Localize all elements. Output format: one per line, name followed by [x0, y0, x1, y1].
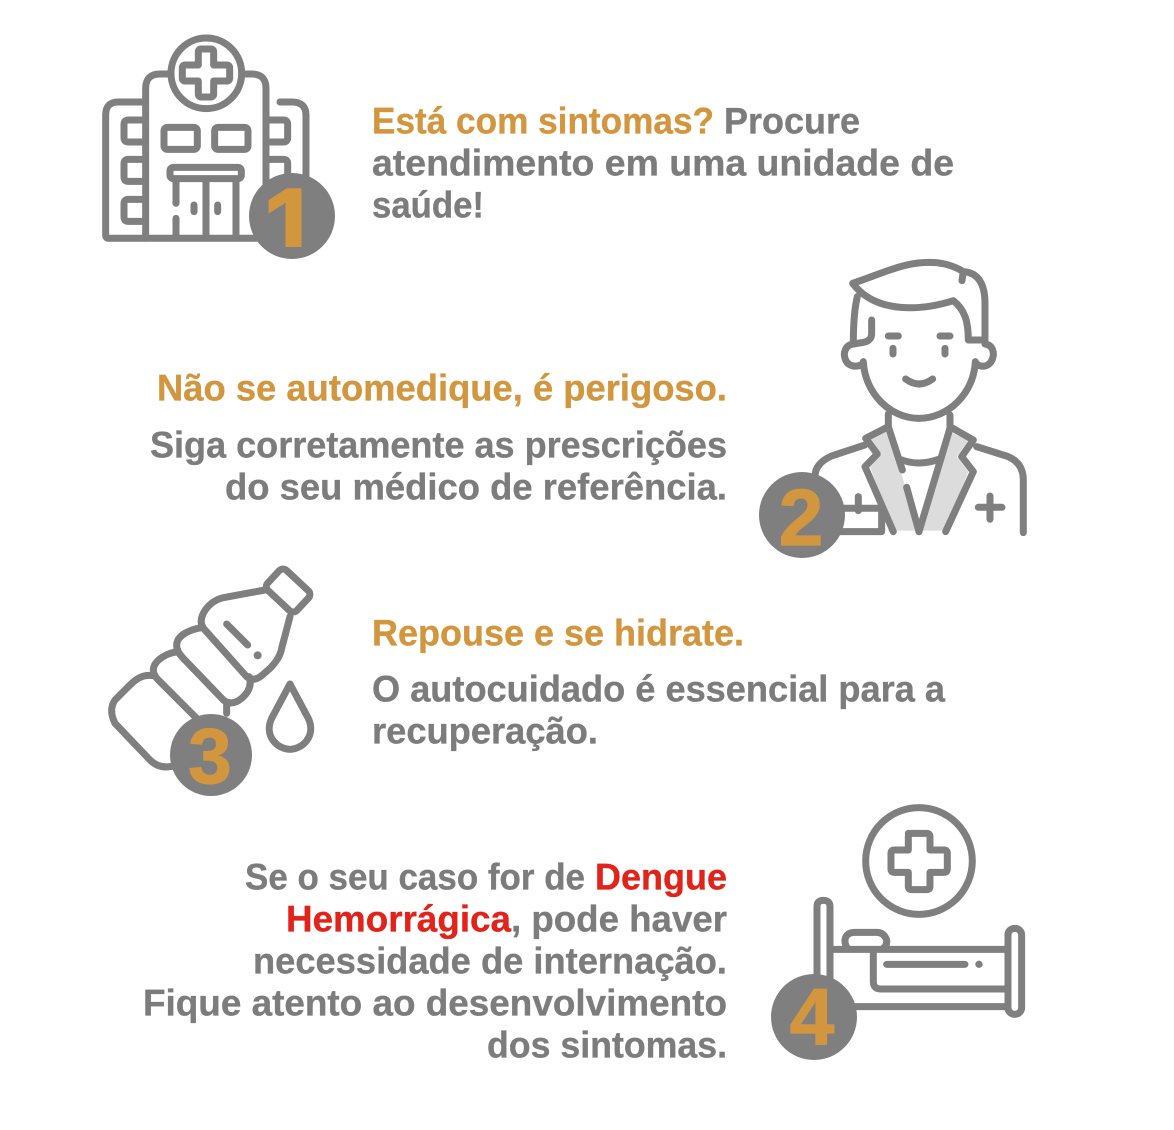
step 4 text: dos sintomas.: [487, 1024, 727, 1066]
step 2 text: do seu médico de referência.: [225, 466, 727, 508]
step 2 text: [150, 368, 727, 508]
step 4 text: Se o seu caso for de: [245, 856, 585, 898]
number badge 2: 2: [779, 473, 823, 562]
step 2: doctor icon with number badge: [759, 262, 1023, 562]
step 3 text: O autocuidado é essencial para a: [372, 668, 945, 710]
step 4 text: , pode haver: [511, 898, 727, 940]
step 1: hospital icon with number badge: [106, 38, 335, 282]
step 4 text: necessidade de internação.: [253, 940, 727, 982]
step 1 text: [372, 100, 954, 226]
step 1 text: Procure: [724, 100, 860, 142]
step 4: hospital bed icon with number badge: [771, 808, 1022, 1061]
number badge 4: 4: [790, 972, 835, 1061]
step 4 text: [143, 856, 727, 1066]
step 2 text: Siga corretamente as prescrições: [150, 424, 727, 466]
step 1 text: Está com sintomas?: [372, 100, 714, 142]
icon: bottle and drop: [112, 567, 312, 767]
number badge 2: [759, 472, 845, 562]
step 3 text: [372, 612, 945, 752]
icon: hospital: [106, 38, 306, 238]
icon: doctor: [815, 262, 1023, 533]
step 3 text: recuperação.: [372, 710, 598, 752]
number badge 1: 1: [263, 168, 319, 282]
step 3: water bottle icon with number badge: [112, 567, 312, 800]
step 4 text: Dengue: [595, 856, 727, 898]
number badge 1: [249, 173, 335, 259]
number badge 3: 3: [188, 712, 232, 800]
step 4 text: Fique atento ao desenvolvimento: [143, 982, 727, 1024]
lapel shading: [870, 430, 968, 531]
step 1 text: saúde!: [372, 184, 484, 226]
step 1 text: atendimento em uma unidade de: [372, 142, 954, 184]
step 3 text: Repouse e se hidrate.: [372, 612, 744, 654]
number badge 3: [170, 712, 252, 800]
step 4 text: Hemorrágica: [286, 898, 511, 940]
number badge 4: [771, 972, 857, 1061]
icon: hospital bed and cross: [817, 808, 1022, 1014]
step 2 text: Não se automedique, é perigoso.: [157, 368, 727, 408]
